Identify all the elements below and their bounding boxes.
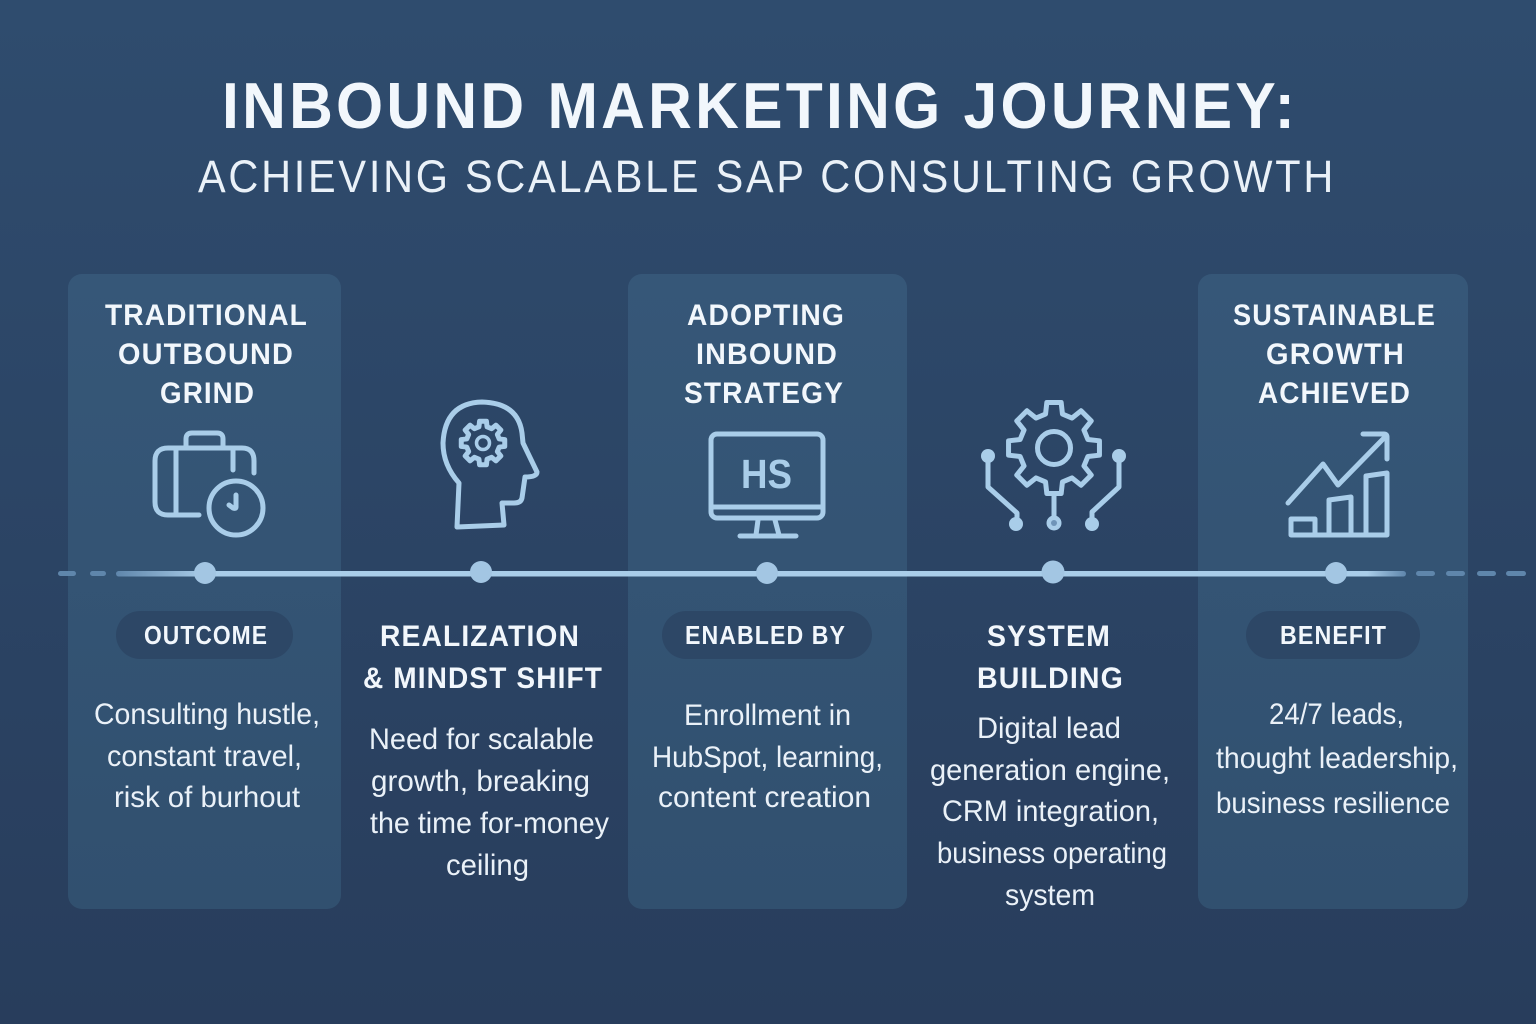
text: outcome: constant travel,: [107, 740, 302, 773]
heading: adopting inbound strategy: STRATEGY: [684, 377, 844, 410]
heading: system building: SYSTEM: [987, 620, 1111, 653]
heading: traditional outbound grind: OUTBOUND: [118, 338, 294, 371]
text: enabled by: HubSpot, learning,: [652, 741, 883, 774]
text: enabled by: [652, 699, 883, 814]
heading: adopting inbound strategy: [684, 299, 845, 410]
timeline: [58, 560, 1526, 584]
text: system building: Digital lead: [977, 712, 1121, 745]
heading: adopting inbound strategy: ADOPTING: [687, 299, 845, 332]
pill: outcome: [116, 611, 293, 659]
text: system building: system: [1005, 879, 1095, 912]
text: realization: ceiling: [446, 849, 529, 882]
title: INBOUND MARKETING JOURNEY:: [222, 69, 1298, 142]
text: enabled by: Enrollment in: [684, 699, 851, 732]
icon: growth chart: [1288, 434, 1387, 535]
icon: head with gear: [443, 402, 537, 527]
icon: monitor HS: HS: [741, 451, 792, 497]
text: realization: Need for scalable: [369, 723, 594, 756]
heading: realization and mindset shift: [363, 620, 603, 695]
heading: system building: BUILDING: [977, 662, 1124, 695]
pill: benefit: [1246, 611, 1420, 659]
text: outcome: risk of burhout: [114, 781, 301, 814]
pill: enabled by: [662, 611, 872, 659]
icon: monitor HS: [711, 434, 823, 536]
text: realization: growth, breaking: [371, 765, 590, 798]
heading: sustainable growth achieved: [1233, 299, 1436, 410]
heading: system building: [977, 620, 1124, 695]
text: realization: the time for-money: [370, 807, 609, 840]
text: outcome: [94, 698, 320, 814]
text: benefit: [1216, 698, 1458, 820]
heading: traditional outbound grind: TRADITIONAL: [105, 299, 308, 332]
pill: enabled by: ENABLED BY: [685, 620, 846, 650]
text: system building: CRM integration,: [942, 795, 1159, 828]
title: [198, 69, 1336, 202]
text: system building: business operating: [937, 837, 1167, 870]
text: realization: [369, 723, 609, 882]
icon: gear with circuit: [981, 403, 1126, 531]
text: system building: [930, 712, 1170, 912]
text: benefit: business resilience: [1216, 787, 1450, 820]
heading: traditional outbound grind: [105, 299, 308, 410]
text: benefit: thought leadership,: [1216, 742, 1458, 775]
heading: realization and mindset shift: REALIZATION: [380, 620, 580, 653]
text: system building: generation engine,: [930, 754, 1170, 787]
heading: realization and mindset shift: & MINDST SHIFT: [363, 662, 603, 695]
text: outcome: Consulting hustle,: [94, 698, 320, 731]
heading: adopting inbound strategy: INBOUND: [696, 338, 838, 371]
text: benefit: 24/7 leads,: [1269, 698, 1404, 731]
icon: briefcase with clock: [155, 433, 263, 535]
pill: benefit: BENEFIT: [1280, 620, 1387, 650]
text: enabled by: content creation: [658, 781, 871, 814]
heading: sustainable growth achieved: ACHIEVED: [1258, 377, 1411, 410]
heading: traditional outbound grind: GRIND: [160, 377, 255, 410]
panel: adopting inbound strategy: [628, 274, 907, 909]
panel: traditional outbound grind: [68, 274, 341, 909]
heading: sustainable growth achieved: SUSTAINABLE: [1233, 299, 1436, 332]
subtitle: ACHIEVING SCALABLE SAP CONSULTING GROWTH: [198, 151, 1336, 202]
panel: sustainable growth achieved: [1198, 274, 1468, 909]
pill: outcome: OUTCOME: [144, 620, 268, 650]
heading: sustainable growth achieved: GROWTH: [1266, 338, 1405, 371]
